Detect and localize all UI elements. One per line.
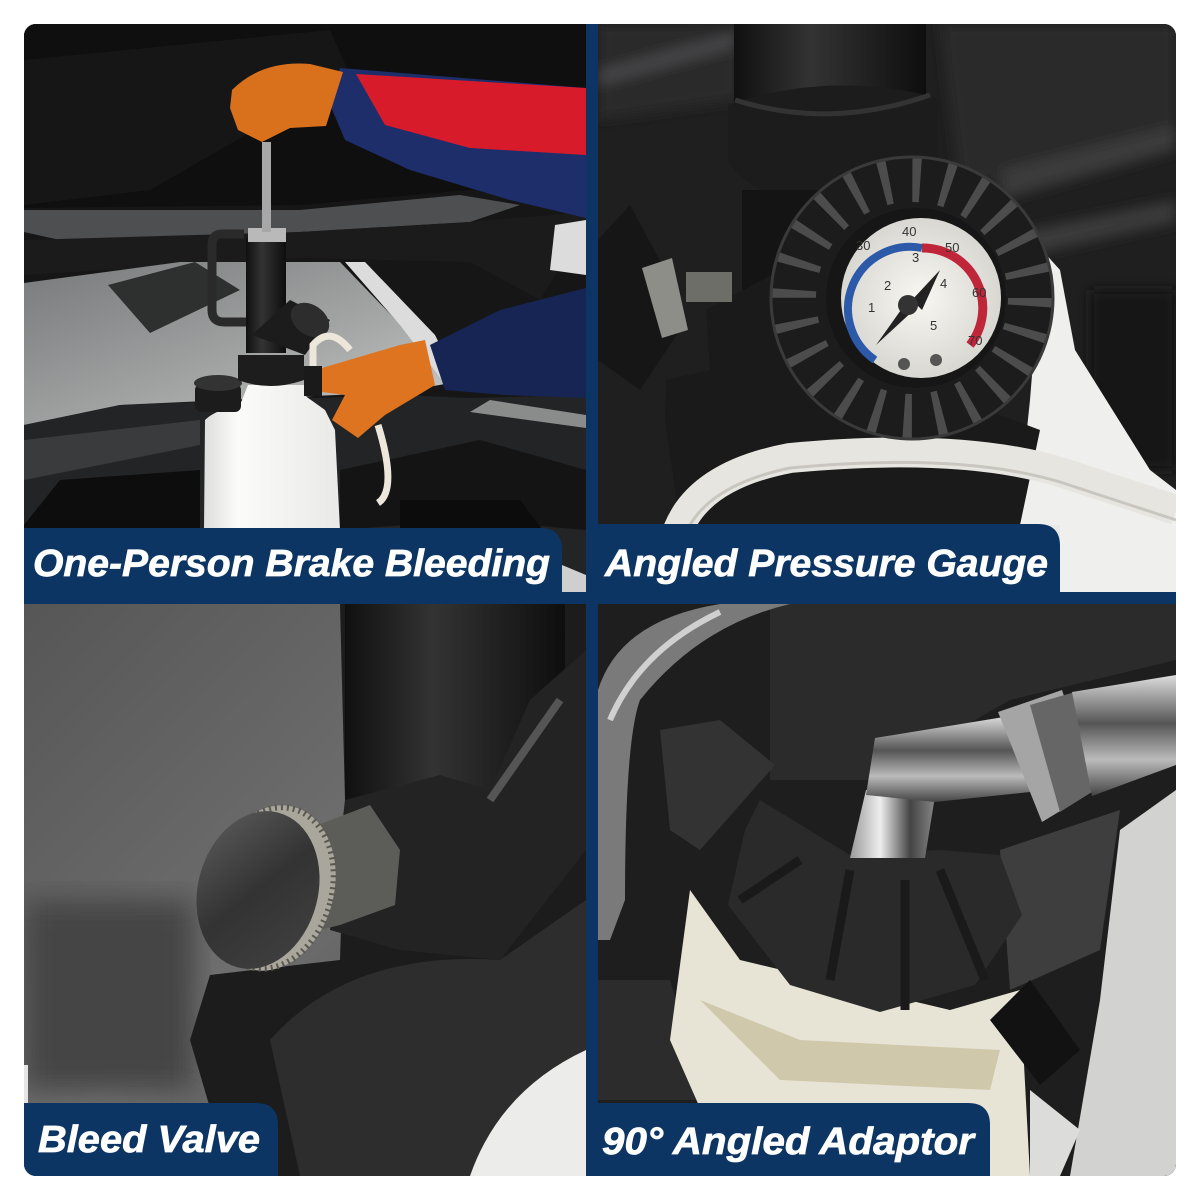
white bottle — [1010, 250, 1176, 592]
casting — [190, 604, 586, 1176]
white reservoir — [670, 890, 1030, 1176]
pump body — [246, 238, 286, 353]
windshield — [24, 262, 445, 425]
gauge numbers: 3 — [912, 250, 919, 265]
label: bleed valve — [24, 1103, 278, 1176]
cap — [728, 800, 1022, 1012]
panel: angled pressure gauge photo — [598, 24, 1176, 592]
knurled knob — [250, 805, 336, 971]
white hose — [470, 1050, 586, 1176]
gauge numbers: 4 — [940, 276, 947, 291]
gauge numbers: 50 — [945, 240, 959, 255]
gauge numbers: 30 — [856, 238, 870, 253]
upper sleeve — [328, 68, 586, 218]
hood frame — [24, 195, 520, 240]
valve knob — [642, 258, 688, 338]
lower glove — [322, 340, 435, 438]
gauge numbers: 70 — [968, 333, 982, 348]
panel: one-person brake bleeding photo — [24, 24, 586, 592]
lower sleeve — [430, 288, 586, 398]
collar — [732, 86, 926, 154]
label: bleed valve: Bleed Valve — [38, 1119, 260, 1161]
label: angled pressure gauge: Angled Pressure Gauge — [604, 543, 1048, 585]
label: one-person brake bleeding — [24, 528, 562, 592]
gauge arcs — [848, 247, 922, 360]
gauge numbers: 2 — [884, 278, 891, 293]
label: one-person brake bleeding: One-Person Brake Bleeding — [33, 543, 550, 585]
knurled collar — [998, 690, 1095, 822]
white tube right — [1070, 790, 1176, 1176]
label: 90 degree angled adaptor: 90° Angled Adaptor — [602, 1121, 976, 1163]
panel: 90 degree angled adaptor photo — [598, 604, 1176, 1176]
panel: bleed valve photo — [24, 604, 586, 1176]
pump tube — [734, 24, 926, 103]
gauge numbers: 60 — [972, 285, 986, 300]
chrome elbow — [850, 790, 936, 858]
gauge numbers: 5 — [930, 318, 937, 333]
hose — [678, 452, 1176, 530]
label: angled pressure gauge — [598, 524, 1060, 592]
valve stem — [320, 805, 400, 930]
engine bay — [24, 395, 586, 592]
gauge numbers: 1 — [868, 300, 875, 315]
gauge needle — [876, 311, 908, 345]
pump handle — [212, 234, 246, 322]
upper glove — [230, 64, 343, 142]
bleeder bottle — [204, 385, 340, 530]
hose — [313, 336, 388, 503]
body — [742, 190, 806, 290]
metal tube — [598, 604, 790, 940]
gauge — [771, 157, 1053, 439]
label: 90 degree angled adaptor — [586, 1103, 990, 1176]
gauge numbers — [856, 224, 986, 348]
clips — [660, 720, 775, 850]
gauge numbers: 40 — [902, 224, 916, 239]
